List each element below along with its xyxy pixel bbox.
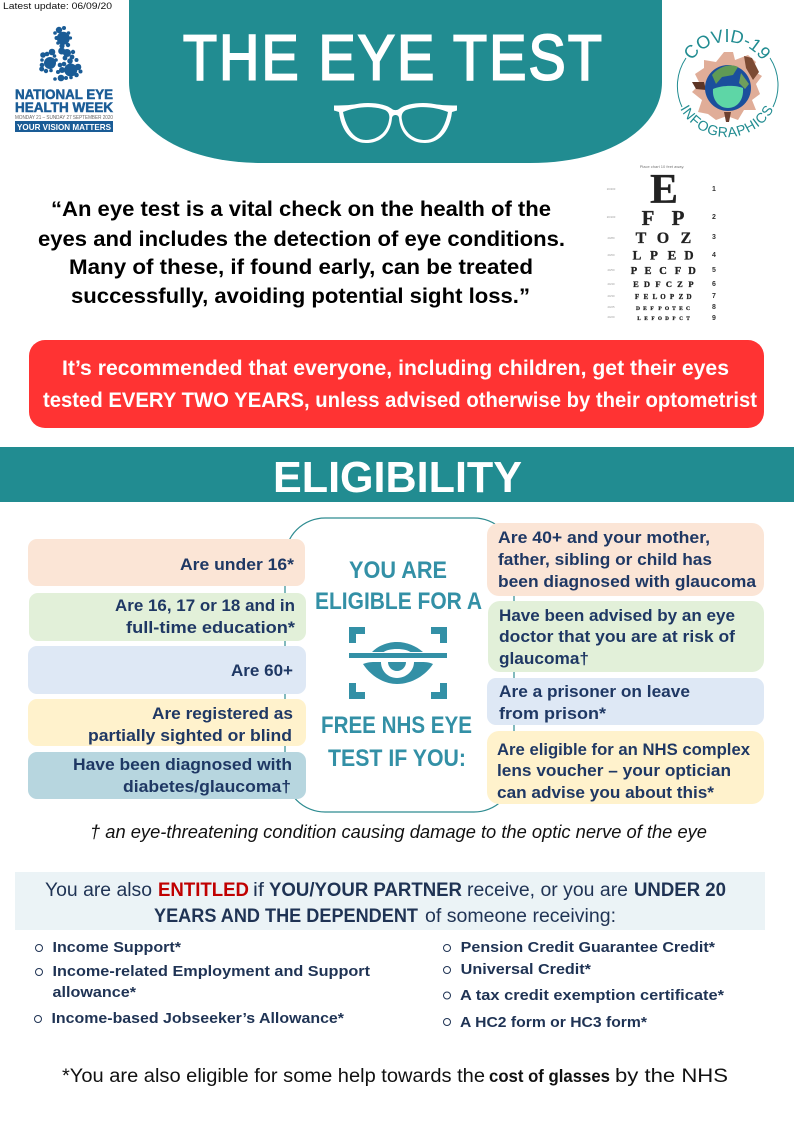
criterion: complex lens voucher bbox=[487, 731, 764, 804]
callout: every two years: tested EVERY TWO YEARS, unless advised otherwise by their optometrist bbox=[43, 389, 757, 412]
criterion: complex lens voucher: can advise you about this* bbox=[497, 783, 714, 802]
eye chart: 20/80 bbox=[608, 236, 615, 240]
icon: hands around globe bbox=[692, 52, 762, 122]
eye chart: 4 bbox=[712, 252, 716, 259]
list: qualifying benefits left: Income-related Employment and Support bbox=[52, 964, 370, 980]
criterion: glaucoma risk: glaucoma† bbox=[499, 649, 589, 668]
eye chart bbox=[607, 164, 716, 322]
logo: National Eye Health Week: NATIONAL EYE bbox=[15, 87, 113, 102]
eye chart: 20/25 bbox=[608, 305, 615, 309]
panel: central eligibility statement: TEST IF YOU: bbox=[328, 745, 466, 772]
list: qualifying benefits right: A HC2 form or HC3 form* bbox=[460, 1015, 647, 1031]
eye chart: 20/40 bbox=[608, 282, 615, 286]
quote: successfully, avoiding potential sight loss.” bbox=[71, 284, 530, 308]
criterion: family glaucoma bbox=[487, 523, 764, 596]
criterion: diabetes or glaucoma: diabetes/glaucoma† bbox=[123, 777, 291, 796]
panel: entitled statement: You are also bbox=[45, 880, 152, 901]
eye chart: 20/20 bbox=[608, 315, 615, 319]
panel: entitled statement: ENTITLED bbox=[158, 880, 249, 901]
eye chart: 2 bbox=[712, 214, 716, 221]
panel: entitled statement: UNDER 20 bbox=[634, 880, 726, 901]
arc text: COVID-19: COVID-19 bbox=[685, 29, 770, 58]
panel: central eligibility statement: YOU ARE bbox=[349, 557, 447, 584]
panel: entitled statement: receive, or you are bbox=[467, 880, 628, 901]
eye chart: FP bbox=[642, 206, 685, 230]
criterion: complex lens voucher: lens voucher – your optician bbox=[497, 761, 731, 780]
callout: every two years bbox=[29, 340, 764, 428]
eye chart: PECFD bbox=[631, 266, 696, 277]
criterion: full-time education: Are 16, 17 or 18 and in bbox=[115, 596, 295, 615]
title banner bbox=[129, 0, 662, 163]
eye chart: 6 bbox=[712, 281, 716, 288]
criterion: glaucoma risk bbox=[488, 601, 764, 672]
title: THE EYE TEST bbox=[183, 22, 604, 93]
list: qualifying benefits right: A tax credit exemption certificate* bbox=[460, 988, 724, 1004]
eye chart: 3 bbox=[712, 234, 716, 241]
list: qualifying benefits right: Pension Credit Guarantee Credit* bbox=[461, 940, 715, 956]
panel: right criteria bbox=[487, 523, 764, 804]
eye chart: EDFCZP bbox=[633, 279, 694, 289]
list: qualifying benefits left: allowance* bbox=[52, 985, 136, 1001]
logo: National Eye Health Week: MONDAY 21 – SUNDAY 27 SEPTEMBER 2020 bbox=[15, 115, 113, 121]
panel: entitled statement: YOU/YOUR PARTNER bbox=[269, 880, 462, 901]
criterion: prisoner: Are a prisoner on leave bbox=[499, 682, 690, 701]
logo: National Eye Health Week bbox=[15, 26, 113, 132]
criterion: sight impaired: partially sighted or blind bbox=[88, 726, 292, 745]
eye chart: 20/200 bbox=[607, 187, 616, 191]
criterion: 60+: Are 60+ bbox=[231, 661, 293, 680]
criterion: diabetes or glaucoma bbox=[28, 752, 306, 799]
criterion: sight impaired bbox=[28, 699, 306, 746]
panel: central eligibility statement: FREE NHS EYE bbox=[321, 712, 472, 739]
panel: left criteria bbox=[28, 539, 306, 799]
closing note: cost of glasses: by the NHS bbox=[615, 1066, 728, 1087]
criterion: 60+ bbox=[28, 646, 306, 694]
criterion: family glaucoma: Are 40+ and your mother, bbox=[498, 528, 710, 547]
eye chart: 20/30 bbox=[608, 294, 615, 298]
icon: scanned eye bbox=[349, 627, 447, 699]
eye chart: LPED bbox=[633, 248, 694, 262]
list: qualifying benefits left: Income-based Jobseeker’s Allowance* bbox=[52, 1011, 344, 1027]
criterion: sight impaired: Are registered as bbox=[152, 704, 293, 723]
quote: Many of these, if found early, can be treated bbox=[69, 255, 533, 279]
panel: central eligibility statement: ELIGIBLE FOR A bbox=[315, 588, 482, 615]
criterion: prisoner: from prison* bbox=[499, 704, 606, 723]
eye chart: Place chart 10 feet away. bbox=[640, 164, 684, 169]
criterion: complex lens voucher: Are eligible for an NHS complex bbox=[497, 740, 751, 759]
quote bbox=[38, 197, 565, 308]
criterion: family glaucoma: been diagnosed with glaucoma bbox=[498, 572, 757, 591]
list: qualifying benefits right: Universal Credit* bbox=[461, 962, 591, 978]
logo: National Eye Health Week: HEALTH WEEK bbox=[15, 100, 113, 115]
criterion: under 16 bbox=[28, 539, 305, 586]
criterion: diabetes or glaucoma: Have been diagnosed with bbox=[73, 755, 292, 774]
eye chart: DEFPOTEC bbox=[636, 306, 690, 312]
heading band: eligibility bbox=[0, 447, 794, 502]
callout: every two years: It’s recommended that everyone, including children, get their eyes bbox=[62, 357, 729, 380]
eye chart: 7 bbox=[712, 293, 716, 300]
criterion: glaucoma risk: doctor that you are at risk of bbox=[499, 627, 735, 646]
eye chart: 20/50 bbox=[608, 268, 615, 272]
eye chart: FELOPZD bbox=[635, 293, 692, 301]
eye chart: E bbox=[650, 167, 678, 213]
ring bbox=[677, 58, 778, 107]
logo: National Eye Health Week: YOUR VISION MATTERS bbox=[17, 122, 111, 132]
closing note: cost of glasses bbox=[62, 1066, 728, 1087]
icon: UK map of circles bbox=[39, 26, 82, 81]
heading band: eligibility: ELIGIBILITY bbox=[273, 453, 522, 502]
list: qualifying benefits left: Income Support* bbox=[52, 940, 181, 956]
eye chart: 5 bbox=[712, 267, 716, 274]
eye chart: LEFODPCT bbox=[637, 317, 690, 322]
panel: entitled statement: if bbox=[253, 880, 265, 901]
closing note: cost of glasses: cost of glasses bbox=[489, 1066, 610, 1086]
eye chart: 9 bbox=[712, 315, 716, 322]
criterion: under 16: Are under 16* bbox=[180, 555, 294, 574]
icon: glasses bbox=[334, 103, 457, 143]
last update note: Latest update: 06/09/20 bbox=[3, 1, 112, 12]
quote: “An eye test is a vital check on the health of the bbox=[51, 197, 551, 221]
list: qualifying benefits left bbox=[34, 940, 370, 1027]
criterion: prisoner bbox=[487, 678, 764, 725]
criterion: full-time education: full-time education* bbox=[126, 618, 295, 637]
panel: entitled statement bbox=[15, 872, 765, 930]
panel: central eligibility statement bbox=[285, 518, 514, 812]
eye chart: TOZ bbox=[636, 230, 691, 247]
eye chart: 20/100 bbox=[607, 215, 616, 219]
eye chart: 20/60 bbox=[608, 253, 615, 257]
panel: entitled statement: of someone receiving: bbox=[425, 906, 616, 927]
list: qualifying benefits right bbox=[444, 940, 724, 1031]
criterion: glaucoma risk: Have been advised by an eye bbox=[499, 606, 735, 625]
eye chart: 8 bbox=[712, 304, 716, 311]
arc text: INFOGRAPHICS: INFOGRAPHICS bbox=[680, 104, 772, 138]
criterion: family glaucoma: father, sibling or child has bbox=[498, 550, 712, 569]
eye chart: 1 bbox=[712, 186, 716, 193]
logo: COVID-19 infographics bbox=[676, 29, 778, 138]
criterion: full-time education bbox=[29, 593, 306, 641]
panel: entitled statement: YEARS AND THE DEPENDENT bbox=[154, 906, 418, 927]
closing note: cost of glasses: *You are also eligible for some help towards the bbox=[62, 1066, 485, 1087]
footnote: † an eye-threatening condition causing damage to the optic nerve of the eye bbox=[90, 822, 707, 842]
quote: eyes and includes the detection of eye conditions. bbox=[38, 227, 565, 251]
